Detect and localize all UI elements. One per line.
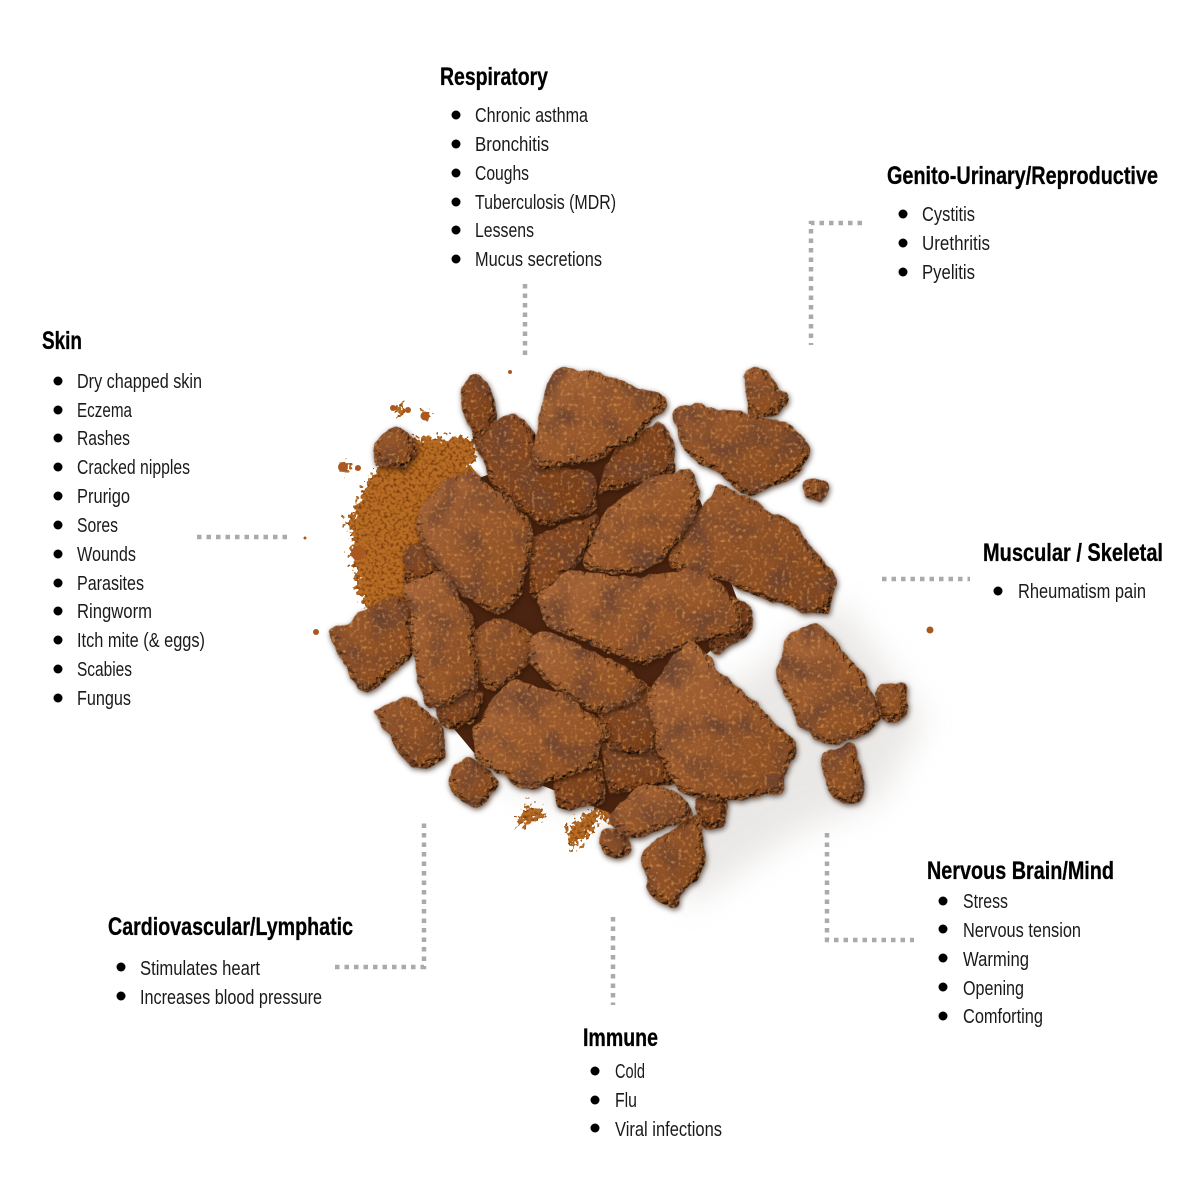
list: nervous: Warming — [963, 949, 1029, 971]
list: nervous: Opening — [963, 978, 1024, 1000]
list: immune: Cold — [615, 1061, 645, 1083]
list: skin: Sores — [77, 515, 118, 537]
list: nervous: Nervous tension — [963, 920, 1081, 942]
main chunks — [333, 410, 829, 691]
list: cardiovascular — [116, 958, 322, 1009]
panel: nervous — [927, 857, 1114, 1028]
connector: respiratory — [523, 284, 527, 356]
connector: muscular — [882, 577, 970, 581]
list: respiratory: Mucus secretions — [475, 249, 602, 271]
list: respiratory: Tuberculosis (MDR) — [475, 192, 616, 214]
orange crumbled powder — [339, 405, 640, 852]
list: nervous: Stress — [963, 891, 1008, 913]
list: immune: Viral infections — [615, 1119, 722, 1141]
list: nervous: Comforting — [963, 1006, 1043, 1028]
soft shadow — [450, 600, 925, 905]
list: skin: Dry chapped skin — [77, 371, 202, 393]
list: respiratory: Coughs — [475, 163, 529, 185]
panel: respiratory — [440, 63, 616, 271]
crumbs — [304, 370, 934, 635]
list: genito-urinary: Urethritis — [922, 233, 990, 255]
heading: cardiovascular: Cardiovascular/Lymphatic — [108, 913, 353, 941]
list: cardiovascular: Increases blood pressure — [140, 987, 322, 1009]
panel: genito-urinary — [887, 162, 1158, 284]
dark gaps between chunks — [415, 435, 745, 825]
list: respiratory: Chronic asthma — [475, 105, 589, 127]
list: muscular skeletal: Rheumatism pain — [1018, 581, 1146, 603]
panel: cardiovascular — [108, 913, 353, 1009]
heading: nervous: Nervous Brain/Mind — [927, 857, 1114, 885]
list: skin: Eczema — [77, 400, 133, 422]
list: skin: Parasites — [77, 573, 144, 595]
list: skin — [54, 371, 205, 710]
back layer chunks — [408, 379, 750, 822]
list: skin: Itch mite (& eggs) — [77, 630, 205, 652]
list: skin: Scabies — [77, 659, 132, 681]
photo: pile of brown resin chunks — [304, 369, 934, 905]
list: skin: Rashes — [77, 428, 130, 450]
list: respiratory: Bronchitis — [475, 134, 549, 156]
list: skin: Cracked nipples — [77, 457, 190, 479]
connector: genito-urinary — [811, 223, 862, 345]
list: genito-urinary — [898, 204, 990, 284]
list: skin: Wounds — [77, 544, 136, 566]
panel: immune — [583, 1024, 722, 1141]
list: nervous — [938, 891, 1081, 1028]
heading: immune: Immune — [583, 1024, 658, 1052]
list: respiratory — [452, 105, 616, 271]
panel: muscular skeletal — [983, 539, 1163, 603]
list: skin: Ringworm — [77, 601, 152, 623]
heading: respiratory: Respiratory — [440, 63, 548, 91]
list: genito-urinary: Pyelitis — [922, 262, 975, 284]
chunks — [333, 369, 903, 902]
list: immune — [590, 1061, 722, 1141]
connector: cardiovascular — [335, 820, 424, 967]
list: respiratory: Lessens — [475, 220, 534, 242]
list: cardiovascular: Stimulates heart — [140, 958, 260, 980]
list: genito-urinary: Cystitis — [922, 204, 975, 226]
list: skin: Prurigo — [77, 486, 130, 508]
connector: immune — [611, 917, 615, 1005]
small chunks — [378, 372, 903, 902]
heading: skin: Skin — [42, 327, 82, 355]
list: immune: Flu — [615, 1090, 637, 1112]
list: skin: Fungus — [77, 688, 131, 710]
connector: nervous — [827, 833, 914, 940]
panel: skin — [42, 327, 205, 710]
connector: skin — [197, 535, 289, 539]
